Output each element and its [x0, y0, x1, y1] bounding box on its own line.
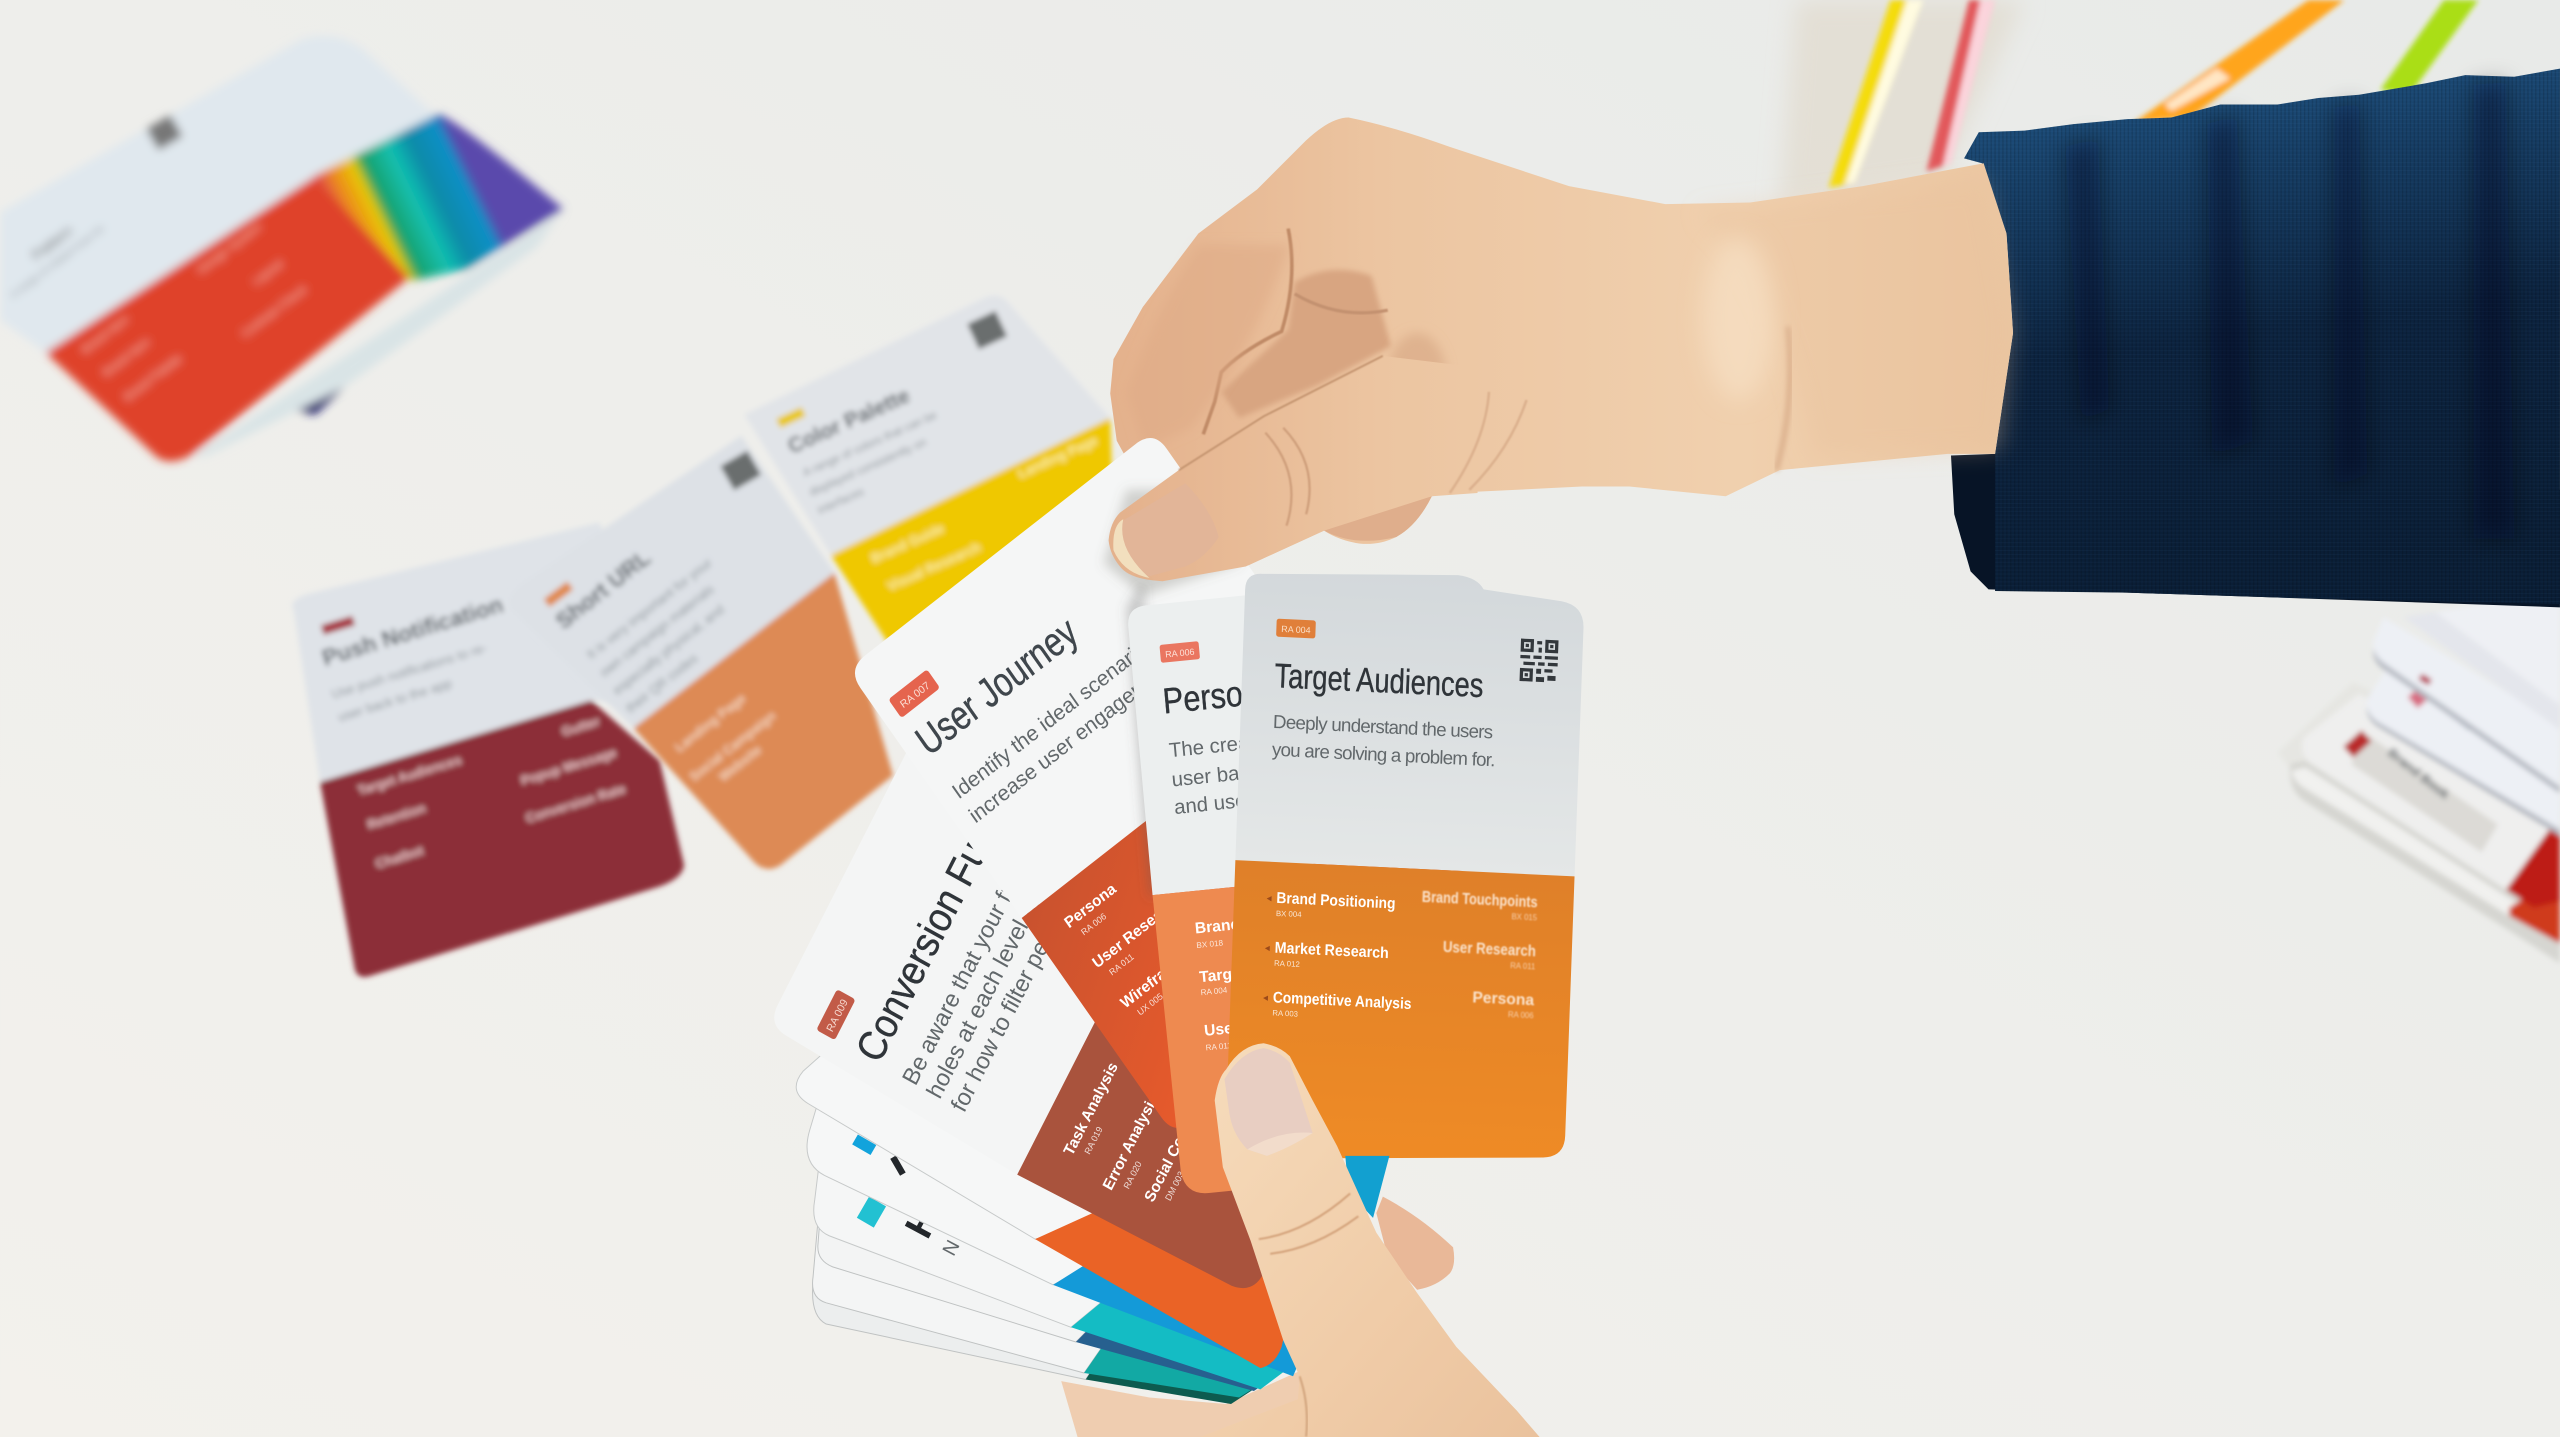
tag: cyan: [857, 1197, 886, 1228]
loose card: Color Palette, out of focus: Brand Guide: [869, 520, 946, 566]
pen: red: [1927, 0, 1995, 171]
description: Target Audiences: [1272, 711, 1497, 770]
card deck, top left, out of focus: Contrast Check: [240, 283, 310, 340]
description: Target Audiences: you are solving a problem for.: [1272, 739, 1496, 770]
loose card: Short URL, out of focus: Social Campaign: [687, 708, 779, 784]
list: User Journey links: User Research: [1090, 891, 1185, 972]
card: teal high: [814, 1053, 1306, 1389]
list: Persona links: RA 011: [1205, 1041, 1233, 1053]
loose card: Push Notification, out of focus: [292, 522, 686, 977]
card: teal low: [813, 1053, 1306, 1397]
loose card: Color Palette, out of focus: Landing Page: [1016, 433, 1100, 481]
tag: RA 006: RA 006: [1165, 647, 1195, 660]
card: bottom dark green: [813, 1053, 1306, 1404]
list: User Journey links: Persona: [1061, 880, 1120, 932]
list: related cards, right column: Persona: [1472, 989, 1535, 1009]
description: Conversion Funnel: holes at each level and plan: [922, 829, 1078, 1103]
loose card: Push Notification, out of focus: Gutter: [560, 713, 602, 739]
description: Persona: and user goals: [1173, 784, 1308, 819]
card deck, top left, out of focus: Layout: [251, 257, 286, 288]
hand: back of the upper hand and index finger: [1110, 118, 2013, 567]
card: teal high: H: [897, 1200, 949, 1245]
description: Target Audiences: Deeply understand the users: [1273, 711, 1494, 742]
list: User Journey links: UX 005: [1135, 991, 1165, 1018]
list: related cards, right column: RA 011: [1510, 961, 1536, 971]
shadow between pens: [1780, 0, 2024, 204]
title: Target Audiences: Target Audiences: [1274, 657, 1484, 705]
list: Persona links: Brand Guide: [1194, 911, 1289, 937]
loose card: Push Notification, out of focus: Popup Message: [519, 745, 618, 788]
icon: QR code: [1520, 639, 1559, 683]
loose card: Push Notification, out of focus: Target Audiences: [356, 752, 463, 798]
loose card: Color Palette, out of focus: displayed consistently on: [808, 437, 929, 499]
list: related cards, left column: RA 012: [1274, 959, 1300, 969]
list: User Journey links: [1061, 851, 1220, 1023]
card: Persona: [1127, 589, 1362, 1196]
list: Persona links: RA 004: [1200, 986, 1228, 997]
blue card corners right of the lower thumb: [1345, 1156, 1389, 1218]
thumb pressing the User Journey card: [1109, 356, 1527, 581]
loose card: Short URL, out of focus: It is very important for your: [584, 555, 715, 662]
card: Target Audiences: [1225, 565, 1585, 1173]
loose card: Color Palette, out of focus: interfaces: [816, 486, 866, 517]
card deck, top left, out of focus: Pattern: [29, 223, 76, 264]
list: related cards, left column: Market Research: [1274, 940, 1389, 962]
loose card: Push Notification, out of focus: Use push notifications to re-: [330, 640, 489, 702]
loose card: Push Notification, out of focus: Push Notification: [319, 591, 506, 671]
list: Conversion Funnel links: DM 003: [1163, 1170, 1186, 1202]
list: related cards, right column: Brand Touchpoints: [1422, 889, 1538, 911]
tag: RA 007: RA 007: [898, 680, 933, 711]
loose card: Push Notification, out of focus: Retention: [366, 800, 427, 832]
description: Conversion Funnel: Be aware that your funnel has: [898, 797, 1063, 1090]
card stack, right edge, out of focus: HTTP: [2440, 701, 2480, 737]
list: Conversion Funnel links: Task Analysis: [1061, 1060, 1122, 1159]
list: Conversion Funnel links: Social Commerce: [1141, 1081, 1216, 1205]
palm behind the fanned cards: [1061, 1368, 1355, 1437]
description: Persona: The creation of a: [1168, 725, 1323, 762]
title: Conversion Funnel: Conversion Funnel: [847, 770, 1028, 1069]
list: Persona links: Target Audiences: [1199, 956, 1329, 986]
loose card: Short URL, out of focus: Website: [716, 742, 764, 784]
list: Conversion Funnel links: RA 019: [1082, 1125, 1105, 1156]
pen: green: [2380, 0, 2478, 95]
list: Persona links: [1194, 908, 1335, 1053]
description: Persona: [1168, 725, 1328, 819]
list: Conversion Funnel links: [1056, 1035, 1227, 1220]
description: Persona: user base: [1171, 761, 1262, 791]
loose card: Short URL, out of focus: Landing Page: [672, 690, 748, 755]
card: navy: [818, 1053, 1306, 1391]
loose card: Short URL, out of focus: [509, 436, 893, 869]
tag: RA 009: [816, 989, 856, 1040]
loose card: Color Palette, out of focus: A range of colors that can be: [801, 409, 939, 479]
title: Persona: Persona: [1161, 669, 1278, 721]
card deck, top left, out of focus: A range of related hues for: [8, 223, 108, 301]
tag: RA 004: RA 004: [1281, 624, 1311, 635]
card deck, top left, out of focus: [0, 36, 563, 461]
list: Conversion Funnel links: RA 020: [1122, 1160, 1144, 1191]
loose card: Short URL, out of focus: their QR codes: [623, 650, 701, 716]
list: related cards, left column: Brand Positioning: [1276, 890, 1396, 913]
pocket between index finger and thumb: [1221, 270, 1391, 418]
pen: yellow: [1829, 0, 1923, 188]
list: related cards, left column: BX 004: [1276, 909, 1302, 919]
loose card: Push Notification, out of focus: user back to the app: [336, 676, 454, 724]
list: User Journey links: Wireframe: [1118, 951, 1187, 1012]
marker pens, top right: [1829, 0, 2478, 188]
list: related cards, left column: RA 003: [1272, 1008, 1299, 1019]
card deck, top left, out of focus: Brand Palette: [122, 353, 184, 404]
lower finger behind the thumb: [1376, 1197, 1454, 1290]
loose card: Push Notification, out of focus: Conversion Rate: [524, 781, 627, 826]
tag: RA 009: RA 009: [824, 997, 851, 1034]
loose card: Short URL, out of focus: own campaign materials: [597, 581, 717, 680]
pen: orange: [2134, 0, 2344, 122]
card deck, top left, out of focus: Design System: [195, 221, 264, 277]
tag: RA 006: [1159, 641, 1200, 663]
sleeve: [1951, 69, 2560, 607]
card deck, top left, out of focus: Brand Item: [101, 336, 153, 380]
nail: [1224, 1048, 1313, 1156]
lower thumb: [1200, 1043, 1540, 1437]
loose card: Push Notification, out of focus: Chatbot: [374, 842, 426, 871]
loose card: Color Palette, out of focus: [745, 296, 1113, 643]
list: related cards, left column: [1262, 889, 1416, 1024]
list: User Journey links: RA 011: [1107, 952, 1136, 977]
shadow of Persona card on User Journey: [1127, 581, 1162, 901]
loose card: Color Palette, out of focus: Visual Research: [885, 539, 983, 594]
fanned back cards: [796, 1045, 1322, 1404]
list: Conversion Funnel links: Error Analysis: [1100, 1091, 1163, 1193]
title: User Journey: User Journey: [907, 608, 1086, 764]
card stack, right edge, out of focus: [2278, 601, 2560, 963]
card: orange: [796, 1045, 1298, 1368]
list: related cards, right column: User Research: [1443, 939, 1536, 960]
list: related cards, right column: [1418, 889, 1539, 1020]
description: User Journey: increase user engagement: [965, 654, 1176, 828]
description: Conversion Funnel: for how to filter people: [947, 896, 1075, 1116]
card: blue: [807, 1053, 1322, 1376]
icon: blurred QR code: [146, 115, 183, 150]
card: teal high: N e: [938, 1222, 972, 1259]
tag: RA 007: [888, 669, 940, 718]
tag: RA 004: [1276, 619, 1316, 638]
loose card: Color Palette, out of focus: Color Palette: [785, 384, 914, 458]
list: Persona links: BX 018: [1196, 938, 1224, 950]
nail: [1113, 483, 1219, 576]
card deck, top left, out of focus: Brand Item: [80, 314, 131, 357]
thumb shadow on the User Journey card: [1104, 490, 1241, 596]
list: related cards, right column: RA 006: [1508, 1010, 1534, 1020]
tag: blue: [852, 1134, 876, 1155]
list: User Journey links: RA 006: [1079, 911, 1108, 937]
list: related cards, left column: Competitive Analysis: [1273, 989, 1412, 1013]
card stack, right edge, out of focus: Brand Book: [2385, 745, 2453, 803]
loose card: Short URL, out of focus: especially physical, and: [610, 602, 727, 698]
loose card: Short URL, out of focus: Short URL: [550, 544, 655, 634]
description: User Journey: Identify the ideal scenario to: [948, 622, 1170, 804]
card: Conversion Funnel: [763, 676, 1431, 1303]
card: User Journey: [847, 430, 1481, 1136]
list: Persona links: User Research: [1203, 1012, 1314, 1040]
list: related cards, right column: BX 015: [1511, 912, 1538, 922]
